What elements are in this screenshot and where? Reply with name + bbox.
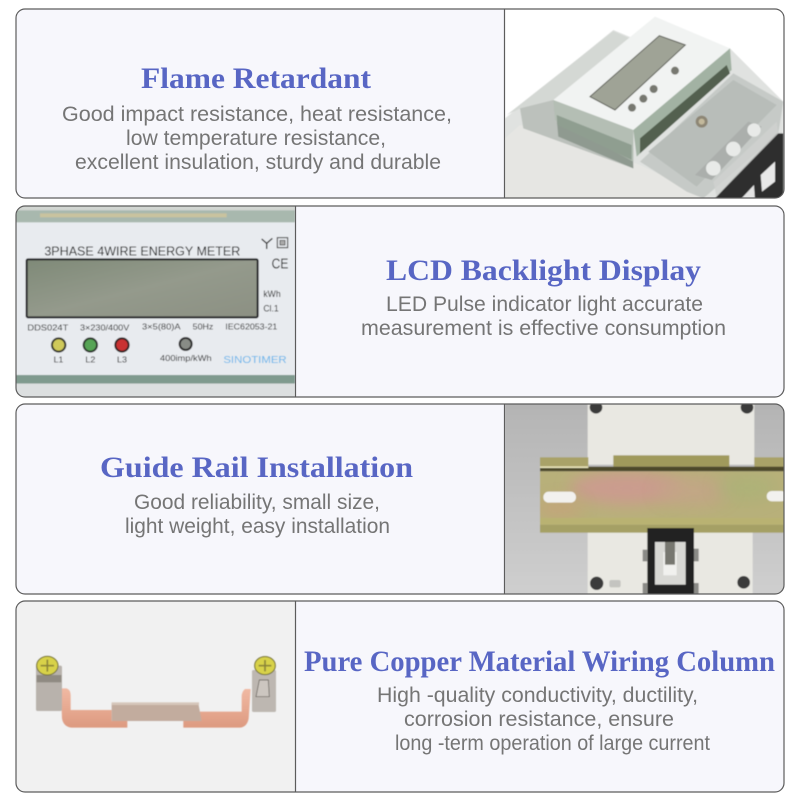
panel: pure copper material wiring column: [16, 601, 784, 792]
panel: lcd backlight display: [15, 205, 784, 398]
heading: pure copper material wiring column: Pure Copper Material Wiring Column: [304, 646, 775, 678]
text block: guide rail description: Good reliability, small size,: [134, 490, 380, 514]
photo: meter front face: Cl.1: [263, 304, 279, 314]
text block: guide rail description: light weight, easy installation: [125, 514, 390, 538]
heading: lcd backlight display: LCD Backlight Display: [386, 255, 701, 287]
panel border: [16, 404, 784, 594]
photo: meter front face: 3×5(80)A: [142, 323, 181, 332]
photo: meter front face: L2: [85, 355, 96, 364]
panel: guide rail installation: [16, 401, 787, 595]
meter label: 3PHASE 4WIRE ENERGY METER: [44, 245, 240, 259]
text block: copper description: corrosion resistance, ensure: [404, 707, 674, 731]
photo: meter front face: kWh: [263, 289, 281, 299]
text block: copper description: High -quality conductivity, ductility,: [377, 683, 698, 707]
photo: meter front face: DDS024T: [27, 323, 68, 332]
text block: guide rail description: [125, 490, 390, 538]
photo: meter front face: SINOTIMER: [223, 355, 287, 366]
text block: lcd description: [361, 292, 726, 340]
text block: copper description: long -term operation of large current: [395, 731, 710, 755]
photo: din rail: [505, 401, 787, 595]
photo: meter front face: 50Hz: [193, 323, 213, 332]
text block: flame retardant description: low temperature resistance,: [126, 126, 386, 150]
photo: meter front face: 400imp/kWh: [160, 354, 212, 363]
photo: copper shunt: [16, 601, 296, 792]
text block: flame retardant description: [62, 102, 452, 174]
photo: meter front face: [15, 205, 295, 398]
panel border: [16, 9, 784, 198]
text block: copper description: [377, 683, 710, 755]
photo: meter front face: 3×230/400V: [80, 323, 130, 332]
panel border: [16, 206, 784, 397]
text block: lcd description: measurement is effective consumption: [361, 316, 726, 340]
panel border: [16, 601, 784, 792]
panel: flame retardant: [16, 9, 785, 200]
text block: lcd description: LED Pulse indicator light accurate: [386, 292, 703, 316]
photo: meter front face: IEC62053-21: [225, 323, 278, 332]
heading: guide rail installation: Guide Rail Installation: [100, 452, 413, 484]
heading: flame retardant: Flame Retardant: [141, 63, 371, 95]
photo: meter in perspective: [505, 9, 785, 200]
text block: flame retardant description: excellent insulation, sturdy and durable: [75, 150, 441, 174]
text block: flame retardant description: Good impact resistance, heat resistance,: [62, 102, 452, 126]
photo: meter front face: L1: [54, 355, 64, 364]
photo: meter front face: L3: [117, 355, 128, 364]
photo: meter front face: CE: [272, 257, 289, 273]
